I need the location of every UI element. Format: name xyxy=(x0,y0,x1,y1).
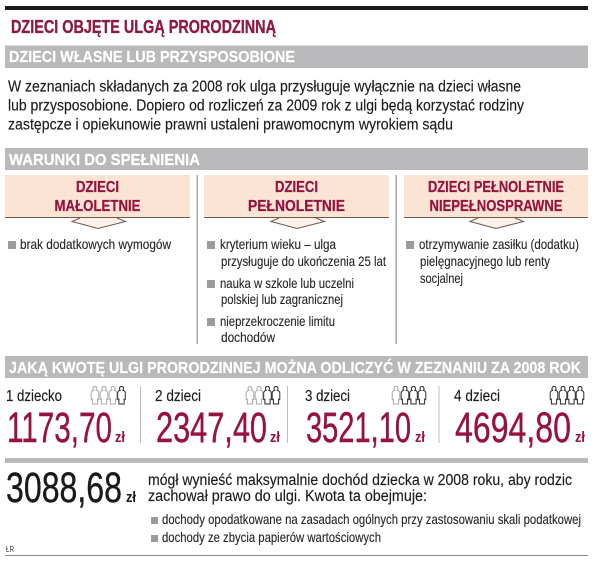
panel: dzieci pełnoletnie niepełnosprawne: NIEPEŁNOSPRAWNE xyxy=(430,198,563,215)
amount: 2 dzieci: 2 dzieci xyxy=(155,388,201,405)
amount: 3 dzieci: 3521,10 xyxy=(306,404,411,452)
panel: dzieci pełnoletnie: przysługuje do ukończenia 25 lat xyxy=(221,253,386,269)
panel: dzieci pełnoletnie: PEŁNOLETNIE xyxy=(248,198,345,215)
panel: dzieci pełnoletnie niepełnosprawne: socjalnej xyxy=(420,270,463,286)
author credit: ŁR xyxy=(6,545,14,554)
panel: dzieci małoletnie: MAŁOLETNIE xyxy=(54,198,141,215)
amount: 2 dzieci xyxy=(155,386,281,452)
amount: 3 dzieci xyxy=(305,386,426,452)
icon: people, 1 of 4 xyxy=(91,386,125,404)
income type list: dochody ze zbycia papierów wartościowych xyxy=(162,529,381,545)
amount: 4 dzieci: zł xyxy=(575,429,586,446)
title: DZIECI OBJĘTE ULGĄ PRORODZINNĄ xyxy=(11,17,276,37)
income limit description xyxy=(148,472,572,505)
panel: dzieci pełnoletnie niepełnosprawne: DZIECI PEŁNOLETNIE xyxy=(428,179,564,196)
panel: dzieci małoletnie xyxy=(5,175,190,252)
income limit description: zachował prawo do ulgi. Kwota ta obejmuje: xyxy=(148,488,427,505)
panel: dzieci pełnoletnie: dochodów xyxy=(221,329,276,345)
panel: dzieci małoletnie: DZIECI xyxy=(76,179,119,196)
panel: dzieci pełnoletnie xyxy=(204,175,389,345)
amount: 1 dziecko: 1173,70 xyxy=(7,404,112,452)
amount: 2 dzieci: 2347,40 xyxy=(156,404,267,452)
intro paragraph: zastępcze i opiekunowie prawni ustaleni prawomocnym wyrokiem sądu xyxy=(8,116,453,134)
intro paragraph: W zeznaniach składanych za 2008 rok ulga przysługuje wyłącznie na dzieci własne xyxy=(8,78,521,96)
icon: people, 2 of 4 xyxy=(246,386,280,404)
panel: dzieci pełnoletnie: nieprzekroczenie limitu xyxy=(220,313,335,329)
amount: 1 dziecko: 1 dziecko xyxy=(6,388,62,405)
section header: warunki xyxy=(5,148,588,170)
intro paragraph: lub przysposobione. Dopiero od rozliczeń za 2009 rok z ulgi będą korzystać rodziny xyxy=(8,98,524,114)
income limit figure: 3088,68 xyxy=(6,464,122,512)
amount: 4 dzieci xyxy=(454,386,586,452)
income limit figure: zł xyxy=(126,489,137,506)
panel: dzieci pełnoletnie: DZIECI xyxy=(275,179,318,196)
intro paragraph xyxy=(8,78,524,134)
panel: dzieci małoletnie: brak dodatkowych wymogów xyxy=(20,236,172,252)
panel: dzieci pełnoletnie niepełnosprawne: pielęgnacyjnego lub renty xyxy=(420,253,550,269)
amount: 1 dziecko: zł xyxy=(115,429,126,446)
amount: 4 dzieci: 4 dzieci xyxy=(454,388,500,405)
section header: warunki: WARUNKI DO SPEŁNIENIA xyxy=(9,152,200,169)
section header: dzieci własne: DZIECI WŁASNE LUB PRZYSPOSOBIONE xyxy=(9,49,295,66)
amount: 1 dziecko xyxy=(6,386,126,452)
section header: dzieci własne xyxy=(5,46,588,68)
icon: people, 4 of 4 xyxy=(550,386,584,404)
amount: 3 dzieci: zł xyxy=(415,429,426,446)
amount: 3 dzieci: 3 dzieci xyxy=(305,388,350,405)
amount: 2 dzieci: zł xyxy=(270,429,281,446)
panel: dzieci pełnoletnie: polskiej lub zagranicznej xyxy=(221,291,343,307)
icon: people, 3 of 4 xyxy=(392,386,426,404)
income type list xyxy=(151,511,581,545)
panel: dzieci pełnoletnie: nauka w szkole lub uczelni xyxy=(220,275,354,291)
panel: dzieci pełnoletnie: kryterium wieku – ulga xyxy=(220,236,336,252)
panel: dzieci pełnoletnie niepełnosprawne xyxy=(404,175,588,286)
